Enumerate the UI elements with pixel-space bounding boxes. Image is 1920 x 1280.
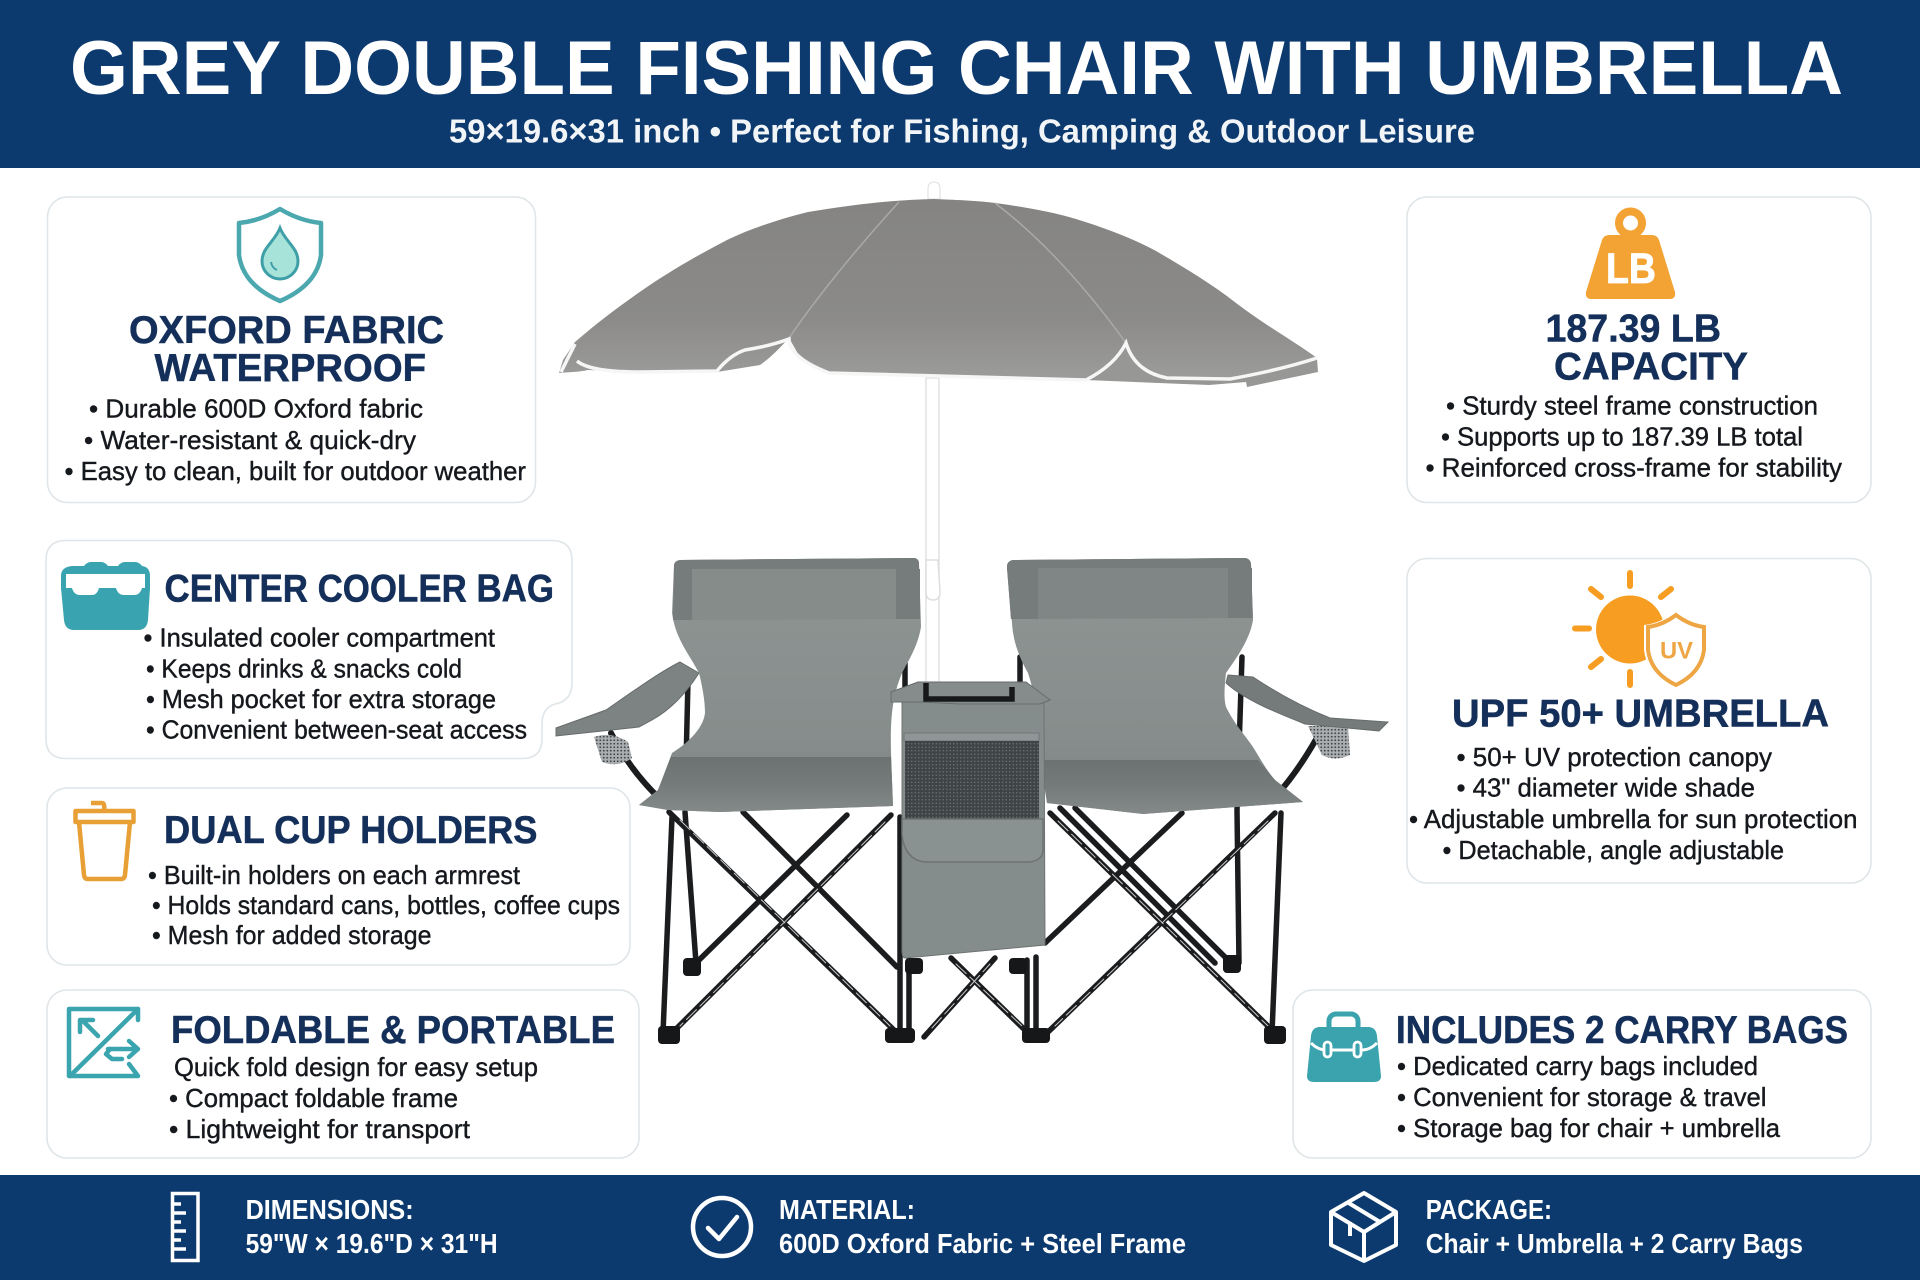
heading: DUAL CUP HOLDERS (164, 809, 538, 852)
bullet list (169, 1052, 538, 1144)
material: MATERIAL: (779, 1194, 915, 1225)
bullet list: • 43" diameter wide shade (1456, 772, 1755, 802)
dimensions: 59"W × 19.6"D × 31"H (246, 1228, 498, 1259)
bullet list: • Convenient for storage & travel (1397, 1082, 1766, 1112)
canopy seams (789, 202, 1126, 343)
bullet list: • Compact foldable frame (169, 1083, 458, 1113)
chair seat: left (639, 558, 921, 812)
heading (129, 309, 444, 390)
bullet list: • Lightweight for transport (169, 1114, 471, 1144)
cup holder: right (1308, 726, 1350, 758)
heading: UPF 50+ UMBRELLA (1452, 692, 1829, 736)
bullet list: • Convenient between-seat access (146, 714, 527, 744)
bullet list: • Dedicated carry bags included (1397, 1051, 1758, 1081)
heading: FOLDABLE & PORTABLE (171, 1009, 615, 1052)
umbrella ferrule (928, 182, 940, 199)
heading: 187.39 LB (1546, 308, 1721, 350)
center cooler bag (891, 682, 1050, 958)
bullet list (144, 622, 527, 744)
bullet list: • Adjustable umbrella for sun protection (1409, 804, 1858, 834)
chair seat: right (1007, 558, 1303, 814)
bullet list: • Sturdy steel frame construction (1446, 390, 1818, 420)
armrest: left (556, 662, 699, 736)
panel: upf umbrella (1407, 558, 1871, 883)
subtitle: 59×19.6×31 inch • Perfect for Fishing, Camping & Outdoor Leisure (449, 112, 1475, 150)
icon: ruler (172, 1194, 198, 1260)
material (779, 1194, 1186, 1259)
heading: WATERPROOF (154, 347, 426, 390)
bullet list: • Durable 600D Oxford fabric (89, 394, 423, 424)
icon: package box (1331, 1193, 1396, 1261)
umbrella pole (926, 378, 940, 693)
bullet list: • Storage bag for chair + umbrella (1397, 1113, 1781, 1143)
icon: sun with uv shield: UV (1660, 638, 1693, 664)
panel: center cooler bag (46, 540, 572, 758)
bullet list: • Water-resistant & quick-dry (84, 425, 416, 455)
bullet list: • Insulated cooler compartment (144, 622, 496, 652)
umbrella canopy (559, 199, 1317, 380)
package (1426, 1194, 1803, 1259)
lower pocket flap (902, 819, 1043, 862)
title: GREY DOUBLE FISHING CHAIR WITH UMBRELLA (70, 26, 1843, 111)
package: Chair + Umbrella + 2 Carry Bags (1426, 1228, 1803, 1259)
panel: dual cup holders (47, 788, 630, 965)
bullet list: • 50+ UV protection canopy (1456, 742, 1772, 772)
chair frame (611, 657, 1324, 1044)
cup holder: left (594, 735, 632, 764)
bullet list: Quick fold design for easy setup (174, 1052, 538, 1082)
frame feet (658, 955, 1286, 1044)
icon: shield with water drop (239, 209, 321, 301)
footer banner (0, 1175, 1920, 1280)
icon: carry bag (1307, 1014, 1381, 1082)
heading: CAPACITY (1554, 346, 1748, 388)
bullet list: • Reinforced cross-frame for stability (1426, 452, 1842, 482)
bullet list: • Mesh for added storage (152, 920, 432, 950)
cooler handle (926, 683, 1012, 699)
package: PACKAGE: (1426, 1194, 1552, 1225)
icon: check circle (693, 1198, 751, 1256)
heading (1546, 308, 1748, 388)
panel: foldable and portable (47, 990, 639, 1158)
bullet list: • Detachable, angle adjustable (1442, 835, 1784, 865)
bullet list: • Keeps drinks & snacks cold (146, 654, 462, 684)
dimensions (246, 1194, 498, 1259)
heading: CENTER COOLER BAG (164, 568, 554, 610)
bullet list: • Mesh pocket for extra storage (146, 684, 496, 714)
bullet list: • Holds standard cans, bottles, coffee cups (152, 890, 620, 920)
umbrella underside skirt (1086, 345, 1318, 387)
bullet list (1409, 742, 1858, 865)
dimensions: DIMENSIONS: (246, 1194, 414, 1225)
panel: oxford fabric waterproof (48, 197, 536, 502)
material: 600D Oxford Fabric + Steel Frame (779, 1228, 1186, 1259)
cooler lid (891, 682, 1050, 704)
heading: OXFORD FABRIC (129, 309, 444, 352)
umbrella (559, 182, 1318, 693)
heading: INCLUDES 2 CARRY BAGS (1396, 1009, 1848, 1052)
bullet list: • Supports up to 187.39 LB total (1441, 422, 1803, 452)
icon: cooler (61, 562, 150, 630)
tube highlights (680, 820, 1268, 1028)
icon: weight (1586, 212, 1675, 299)
icon: cup (76, 803, 134, 879)
panel: weight capacity (1407, 197, 1871, 502)
bullet list: • Built-in holders on each armrest (148, 860, 521, 890)
icon: sun with uv shield (1575, 573, 1708, 689)
cooler bag body (902, 702, 1045, 958)
bullet list (1426, 390, 1842, 482)
bullet list (148, 860, 620, 950)
bullet list: • Easy to clean, built for outdoor weather (64, 456, 526, 486)
bullet list (64, 394, 526, 486)
header banner (0, 0, 1920, 168)
canopy white trim (561, 339, 1317, 380)
panel: includes carry bags (1293, 990, 1871, 1158)
icon: weight: LB (1606, 245, 1656, 293)
mesh pocket (904, 733, 1039, 819)
icon: folding arrows (69, 1009, 138, 1076)
armrest: right (1226, 675, 1388, 731)
bullet list (1397, 1051, 1781, 1143)
